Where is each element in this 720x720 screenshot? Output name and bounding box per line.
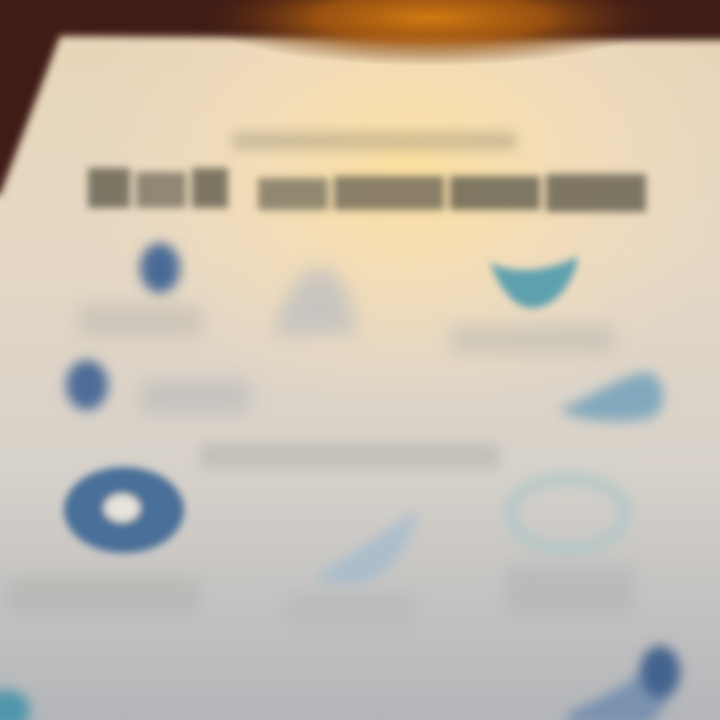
icon: donut bottom left: [64, 467, 184, 553]
label under centre icon: [285, 595, 415, 623]
label under top right icon: [450, 325, 615, 353]
label under top left icon: [78, 305, 203, 337]
icon: middle left blue circle: [66, 360, 108, 410]
small heading line: [232, 132, 517, 150]
label under ring: [505, 565, 635, 615]
icon: bottom right blue shape: [565, 646, 680, 720]
label under donut: [5, 578, 200, 614]
icon: top centre pale shape: [272, 268, 358, 335]
icon: centre arrow shape: [312, 510, 418, 585]
icon: bottom left teal corner: [0, 690, 30, 720]
dark table edge at top: [0, 0, 720, 195]
title: blurred dark text block: [88, 168, 646, 212]
icon: middle right blue shape: [558, 372, 663, 421]
centre subheading: [200, 443, 500, 469]
icon: top right teal shape: [490, 256, 578, 308]
warm light on paper: [80, 0, 720, 420]
icon: pale ring bottom right: [510, 479, 626, 549]
icon: top left blue circle: [140, 243, 180, 293]
label middle left: [140, 380, 250, 414]
